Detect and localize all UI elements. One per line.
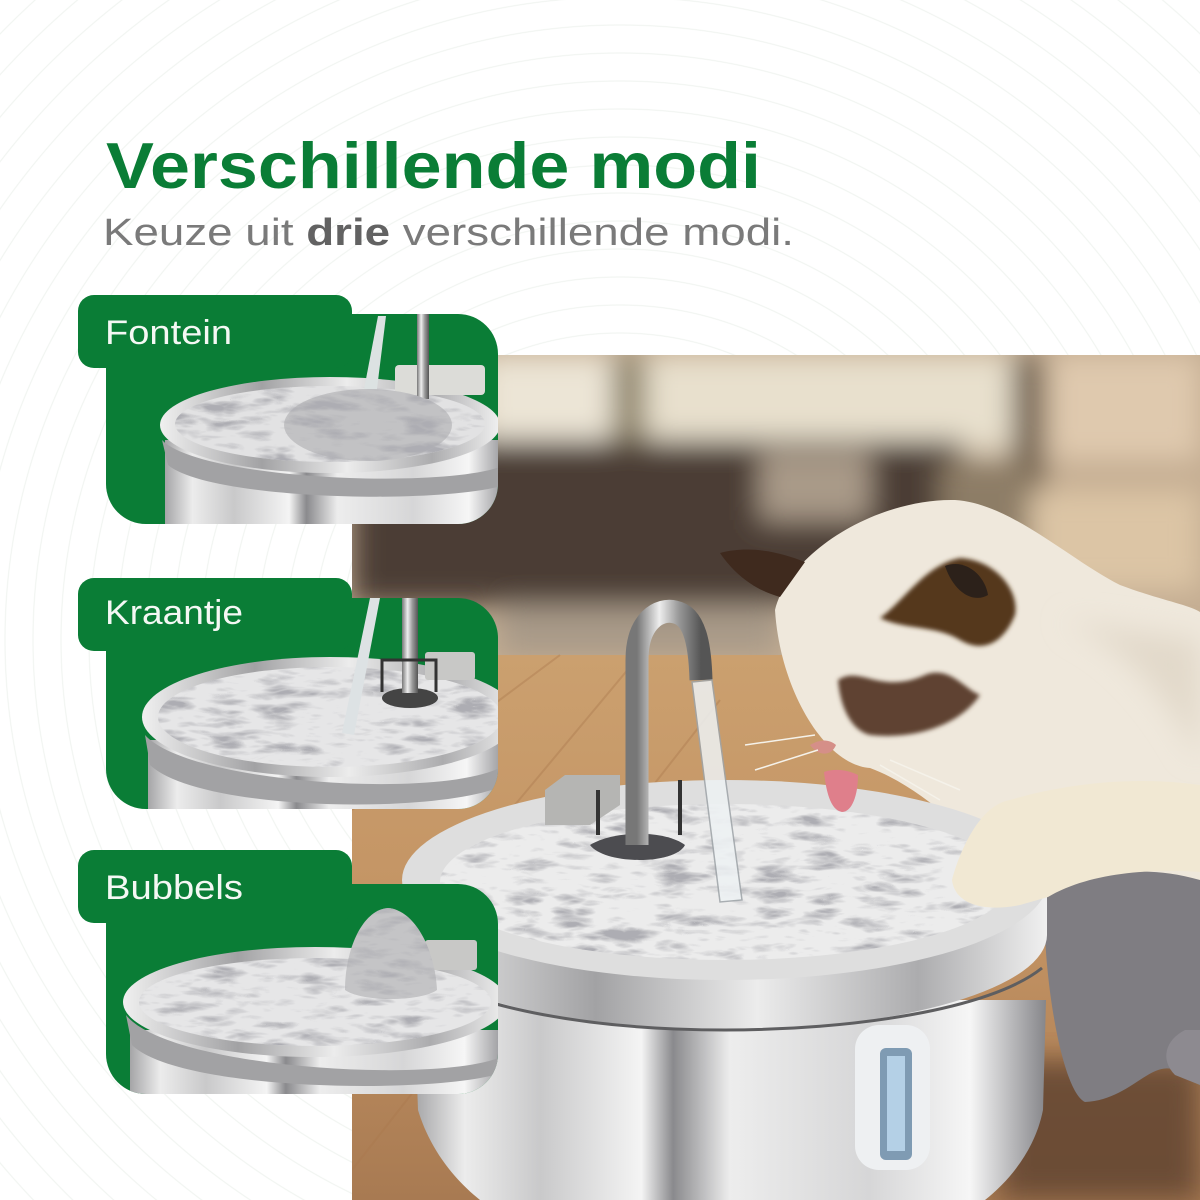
blurred living room background: [352, 355, 1200, 655]
title: Verschillende modi: [106, 129, 761, 202]
cat paw and foreleg: [952, 781, 1200, 908]
tab: Bubbels: [78, 850, 352, 923]
fountain body: [402, 611, 1048, 1200]
wooden floor: [352, 655, 1200, 1200]
card: Kraantje: [78, 578, 518, 809]
tab: Kraantje: [78, 578, 352, 651]
card: Bubbels: [78, 850, 510, 1094]
subtitle: Keuze uit drie verschillende modi.: [103, 212, 794, 254]
cat tongue: [824, 770, 858, 812]
cat body: [720, 500, 1200, 1102]
fountain image: Fontein: [160, 314, 510, 524]
water level window: [855, 1025, 930, 1170]
pump box: [545, 775, 620, 825]
faucet: [590, 611, 742, 902]
card: Fontein: [78, 295, 510, 524]
label: Fontein: Fontein: [105, 314, 232, 352]
tab: Fontein: [78, 295, 352, 368]
fountain image: Bubbels: [123, 908, 510, 1094]
label: Bubbels: Bubbels: [105, 869, 243, 907]
fountain image: Kraantje: [142, 598, 518, 809]
photo: cat drinking from fountain: [352, 355, 1200, 1200]
label: Kraantje: Kraantje: [105, 594, 243, 632]
